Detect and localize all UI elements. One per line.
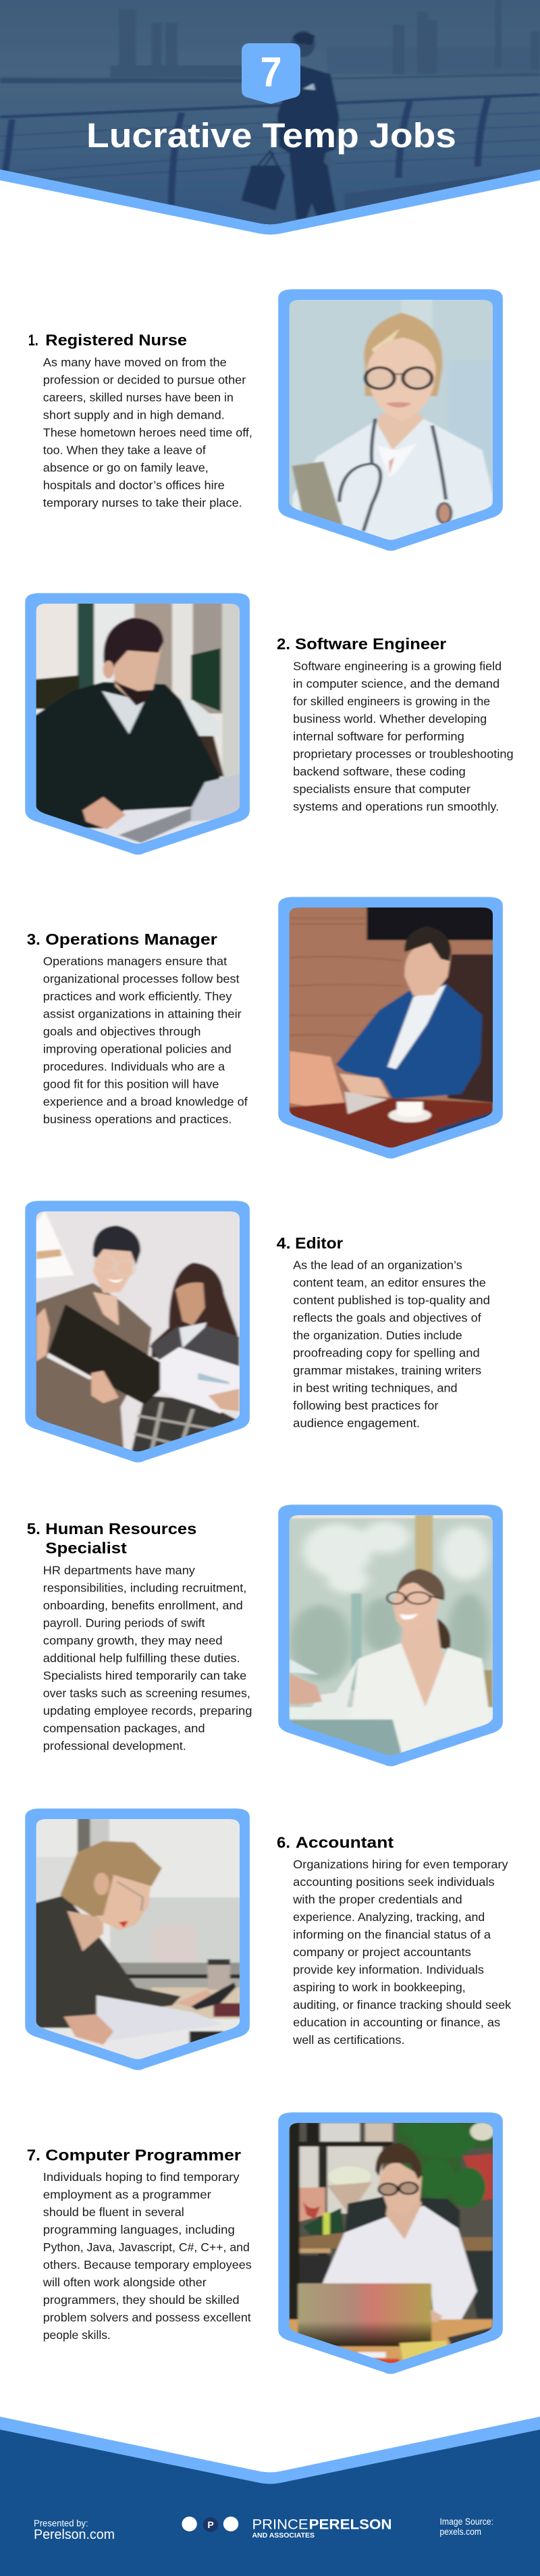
body text: updating employee records, preparing bbox=[43, 1704, 252, 1717]
image source: Image Source: bbox=[440, 2517, 493, 2527]
body text: backend software, these coding bbox=[293, 765, 466, 779]
body text bbox=[292, 1858, 511, 2047]
body text: for skilled engineers is growing in the bbox=[293, 695, 490, 708]
heading: Editor bbox=[295, 1234, 343, 1252]
presented by bbox=[34, 2518, 115, 2542]
photo in shield frame: smiling woman in white bbox=[278, 1504, 503, 1766]
body text: These hometown heroes need time off, bbox=[43, 426, 252, 440]
body text: education in accounting or finance, as bbox=[293, 2016, 500, 2029]
photo in shield frame: man in hoodie at laptop bbox=[25, 593, 250, 855]
body text: proofreading copy for spelling and bbox=[293, 1346, 480, 1360]
body text: informing on the financial status of a bbox=[293, 1928, 491, 1941]
photo in shield frame: man in blue suit bbox=[278, 897, 503, 1159]
header banner bbox=[0, 0, 540, 255]
body text: business operations and practices. bbox=[43, 1113, 232, 1126]
presented by: Perelson.com bbox=[34, 2527, 115, 2542]
body text: procedures. Individuals who are a bbox=[43, 1060, 225, 1074]
body text: in best writing techniques, and bbox=[293, 1382, 458, 1395]
body text: problem solvers and possess excellent bbox=[43, 2311, 251, 2324]
light blue chevron band bbox=[0, 2417, 540, 2483]
body text: audience engagement. bbox=[293, 1417, 420, 1430]
body text bbox=[293, 1259, 490, 1430]
image source bbox=[440, 2517, 493, 2537]
heading: 6. bbox=[277, 1833, 290, 1851]
body text: grammar mistakes, training writers bbox=[293, 1364, 481, 1377]
body text: payroll. During periods of swift bbox=[43, 1616, 205, 1629]
body text: careers, skilled nurses have been in bbox=[43, 391, 234, 404]
body text: systems and operations run smoothly. bbox=[293, 800, 499, 814]
heading: 4. bbox=[277, 1234, 291, 1252]
body text: Specialists hired temporarily can take bbox=[43, 1668, 246, 1682]
body text bbox=[43, 1563, 252, 1752]
body text: organizational processes follow best bbox=[43, 972, 240, 986]
panel 1: registered nurse bbox=[28, 289, 503, 551]
photo in shield frame: programmer at laptop among plants bbox=[278, 2112, 503, 2374]
body text: business world. Whether developing bbox=[293, 712, 487, 726]
heading: Specialist bbox=[45, 1540, 127, 1557]
photo in shield frame: nurse bbox=[278, 289, 503, 551]
photo in shield frame: two women with folder bbox=[25, 1201, 250, 1463]
body text: well as certifications. bbox=[292, 2033, 405, 2047]
body text: Python, Java, Javascript, C#, C++, and bbox=[43, 2240, 250, 2254]
body text: professional development. bbox=[43, 1739, 186, 1752]
body text: too. When they take a leave of bbox=[43, 444, 206, 457]
heading bbox=[27, 1520, 196, 1557]
panel 2: software engineer bbox=[25, 593, 514, 855]
body text: provide key information. Individuals bbox=[293, 1963, 484, 1976]
logo: prince perelson and associates bbox=[182, 2517, 392, 2540]
heading: Operations Manager bbox=[45, 930, 217, 948]
heading: 7. bbox=[27, 2146, 40, 2163]
body text: additional help fulfilling these duties. bbox=[43, 1651, 240, 1664]
heading: 1. bbox=[28, 332, 38, 349]
body text: compensation packages, and bbox=[43, 1721, 205, 1735]
panel 6: accountant bbox=[25, 1808, 511, 2070]
background photo: businessman on waterfront bbox=[0, 0, 540, 224]
body text: Organizations hiring for even temporary bbox=[293, 1858, 508, 1871]
heading: 5. bbox=[27, 1520, 40, 1537]
body text: over tasks such as screening resumes, bbox=[43, 1686, 250, 1700]
body text: aspiring to work in bookkeeping, bbox=[293, 1980, 466, 1994]
body text: improving operational policies and bbox=[43, 1043, 232, 1056]
presented by: Presented by: bbox=[34, 2518, 88, 2529]
body text: following best practices for bbox=[293, 1399, 439, 1413]
light blue chevron band bbox=[0, 169, 540, 235]
body text: internal software for performing bbox=[293, 730, 464, 743]
panel 3: operations manager bbox=[27, 897, 503, 1159]
heading: Accountant bbox=[296, 1833, 394, 1851]
body text: HR departments have many bbox=[43, 1563, 195, 1577]
body text: experience and a broad knowledge of bbox=[43, 1095, 248, 1109]
panel 4: editor bbox=[25, 1201, 490, 1463]
body text: Software engineering is a growing field bbox=[293, 660, 502, 673]
heading: Software Engineer bbox=[295, 635, 446, 653]
logo: prince perelson and associates: PRINCE bbox=[252, 2517, 308, 2533]
body text: practices and work efficiently. They bbox=[43, 990, 232, 1003]
body text: As many have moved on from the bbox=[43, 356, 227, 369]
body text: good fit for this position will have bbox=[43, 1078, 219, 1091]
body text: with the proper credentials and bbox=[292, 1893, 462, 1906]
body text bbox=[293, 660, 514, 814]
panel 5: human resources specialist bbox=[27, 1504, 503, 1766]
body text: absence or go on family leave, bbox=[43, 461, 209, 475]
body text: Individuals hoping to find temporary bbox=[43, 2170, 240, 2184]
body text: specialists ensure that computer bbox=[293, 783, 470, 796]
body text: company growth, they may need bbox=[43, 1633, 223, 1647]
body text: people skills. bbox=[43, 2328, 111, 2342]
body text: proprietary processes or troubleshooting bbox=[293, 747, 514, 761]
footer bbox=[0, 2417, 540, 2576]
body text: the organization. Duties include bbox=[293, 1329, 462, 1342]
body text: reflects the goals and objectives of bbox=[293, 1311, 481, 1325]
body text: content team, an editor ensures the bbox=[293, 1276, 486, 1290]
heading: Human Resources bbox=[45, 1520, 196, 1537]
body text: Operations managers ensure that bbox=[43, 955, 227, 968]
body text: auditing, or finance tracking should seek bbox=[293, 1998, 511, 2012]
body text: onboarding, benefits enrollment, and bbox=[43, 1598, 243, 1612]
body text bbox=[43, 356, 252, 510]
body text: assist organizations in attaining their bbox=[43, 1007, 242, 1021]
panel 7: computer programmer bbox=[27, 2112, 503, 2374]
body text: responsibilities, including recruitment, bbox=[43, 1581, 246, 1594]
badge with number 7 bbox=[242, 43, 300, 104]
body text: profession or decided to pursue other bbox=[43, 373, 246, 387]
body text: accounting positions seek individuals bbox=[293, 1875, 495, 1889]
body text: others. Because temporary employees bbox=[43, 2258, 252, 2271]
body text: temporary nurses to take their place. bbox=[43, 496, 242, 510]
body text: programmers, they should be skilled bbox=[43, 2293, 240, 2307]
logo: prince perelson and associates: PERELSON bbox=[309, 2517, 392, 2533]
image source: pexels.com bbox=[440, 2527, 481, 2537]
body text: will often work alongside other bbox=[43, 2276, 207, 2289]
body text bbox=[43, 955, 248, 1126]
body text: programming languages, including bbox=[43, 2223, 235, 2236]
heading: Computer Programmer bbox=[45, 2146, 241, 2163]
body text: experience. Analyzing, tracking, and bbox=[293, 1910, 485, 1924]
body text: As the lead of an organization’s bbox=[293, 1259, 462, 1272]
heading: 3. bbox=[27, 930, 40, 948]
body text: goals and objectives through bbox=[43, 1025, 200, 1039]
body text: in computer science, and the demand bbox=[293, 677, 500, 691]
body text: employment as a programmer bbox=[43, 2188, 211, 2201]
body text: hospitals and doctor’s offices hire bbox=[43, 479, 225, 492]
photo in shield frame: woman with calculator and binder bbox=[25, 1808, 250, 2070]
logo: prince perelson and associates: AND ASSOCIATES bbox=[252, 2532, 315, 2540]
badge with number 7: 7 bbox=[261, 49, 282, 96]
body text: short supply and in high demand. bbox=[43, 409, 225, 422]
heading: Registered Nurse bbox=[45, 332, 187, 349]
body text: content published is top-quality and bbox=[293, 1294, 490, 1307]
footer background bbox=[0, 2429, 540, 2576]
title: Lucrative Temp Jobs bbox=[86, 116, 456, 155]
logo: prince perelson and associates: P bbox=[207, 2519, 214, 2530]
body text: company or project accountants bbox=[293, 1945, 471, 1959]
body text: should be fluent in several bbox=[43, 2205, 184, 2219]
heading bbox=[277, 1234, 343, 1252]
body text bbox=[43, 2170, 252, 2342]
heading: 2. bbox=[277, 635, 290, 653]
